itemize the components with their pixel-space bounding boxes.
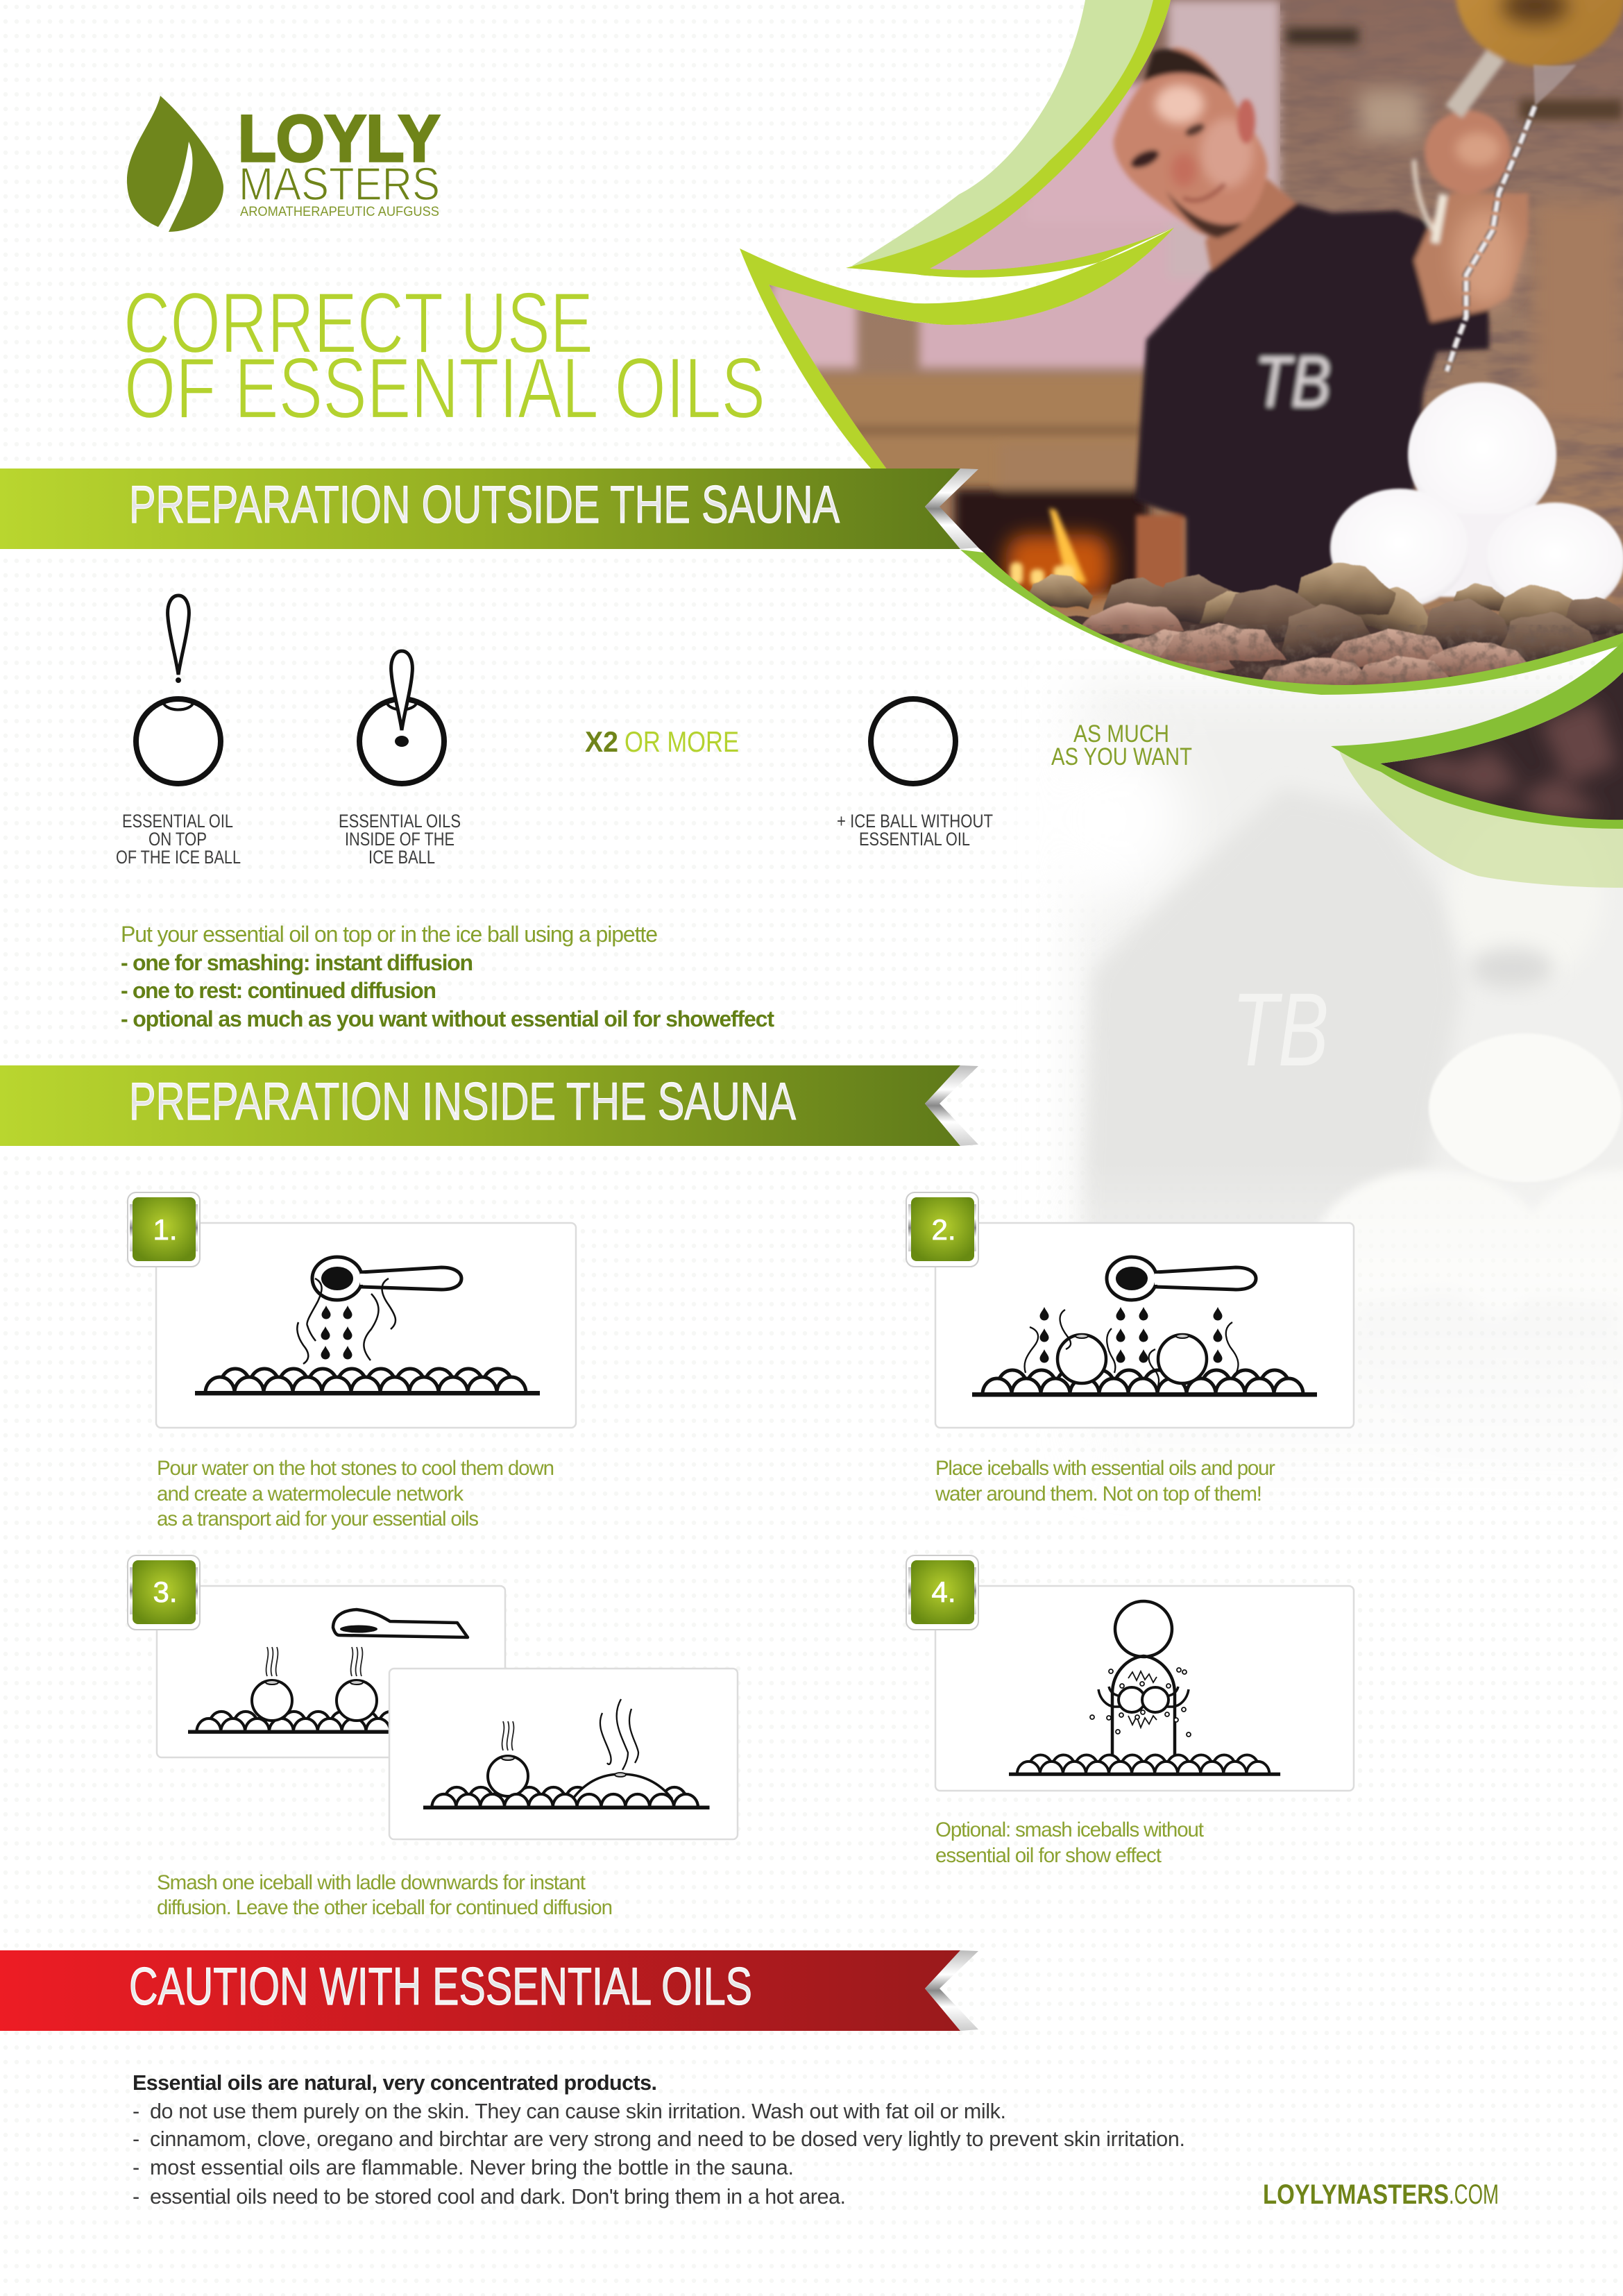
head	[1114, 47, 1268, 238]
green swoosh top translucent	[852, 0, 1166, 272]
text: as much as you want: AS MUCH	[1073, 720, 1169, 748]
title: CORRECT USE	[124, 276, 593, 371]
text: as much as you want	[1051, 720, 1192, 770]
ghost logo: TB	[1232, 971, 1329, 1088]
text: step 4 caption: essential oil for show effect	[935, 1844, 1162, 1867]
label: essential oil on top: ON TOP	[148, 829, 207, 850]
text: step 4 caption	[935, 1818, 1204, 1867]
hero photo	[729, 0, 1623, 701]
logo wordmark: LOYLY	[238, 102, 440, 176]
raised arm	[1414, 193, 1529, 327]
step badge 4	[906, 1555, 978, 1630]
text: step 3 caption: Smash one iceball with ladle downwards for instant	[157, 1871, 586, 1894]
banner: caution with essential oils: CAUTION WITH ESSENTIAL OILS	[129, 1957, 752, 2016]
panel: step 3	[128, 1555, 738, 1839]
panel: step 4	[906, 1555, 1354, 1791]
text block: caution list: -	[133, 2127, 139, 2151]
label: ice ball without oil: + ICE BALL WITHOUT	[837, 811, 993, 832]
ladle	[1454, 0, 1623, 112]
banner: preparation inside the sauna	[0, 1065, 978, 1146]
logo masters: MASTERS	[239, 158, 440, 210]
faded ghost photo background	[1048, 686, 1623, 1222]
label: essential oils inside: INSIDE OF THE	[345, 829, 454, 850]
rocks	[999, 562, 1623, 701]
step badge 1	[128, 1192, 200, 1267]
man	[1114, 47, 1529, 597]
text block: caution list: do not use them purely on the skin. They can cause skin irritation. Wash out with fat oil or milk.	[150, 2100, 1006, 2123]
illustration: ice balls and water drops	[972, 1257, 1317, 1396]
step badge 4: 4.	[931, 1576, 956, 1608]
banner: caution with essential oils	[0, 1950, 978, 2031]
neck	[1205, 178, 1296, 273]
step badge 2: 2.	[931, 1213, 956, 1246]
panel: step 2	[906, 1192, 1354, 1428]
illustration: smashing ice balls	[1009, 1601, 1280, 1776]
text block: caution list: cinnamom, clove, oregano and birchtar are very strong and need to be dosed very lightly to prevent skin irritation.	[150, 2127, 1185, 2151]
label: essential oils inside: ESSENTIAL OILS	[339, 811, 461, 832]
text block: oil instructions: Put your essential oil on top or in the ice ball using a pipette	[121, 922, 658, 947]
card: ladle above ice balls	[157, 1586, 505, 1757]
banner: preparation outside the sauna: PREPARATION OUTSIDE THE SAUNA	[129, 475, 840, 534]
text: step 1 caption: Pour water on the hot stones to cool them down	[157, 1457, 554, 1480]
shirt logo: TB	[1255, 341, 1331, 423]
text block: caution list: -	[133, 2156, 139, 2179]
panel: step 1	[128, 1192, 576, 1428]
text: step 1 caption	[157, 1457, 554, 1530]
icon: plain ice ball	[871, 699, 955, 784]
label: essential oil on top: OF THE ICE BALL	[116, 847, 241, 868]
text: step 2 caption: Place iceballs with essential oils and pour	[935, 1457, 1275, 1480]
step badge 3	[128, 1555, 200, 1630]
text block: caution list: -	[133, 2100, 139, 2123]
banner: preparation inside the sauna: PREPARATION INSIDE THE SAUNA	[129, 1072, 796, 1131]
text: step 4 caption: Optional: smash iceballs without	[935, 1818, 1204, 1841]
label: essential oil on top: ESSENTIAL OIL	[122, 811, 233, 832]
banner: preparation outside the sauna	[0, 469, 978, 549]
fire flames	[1010, 508, 1087, 586]
label: essential oils inside	[339, 811, 461, 868]
lower arm	[1136, 515, 1183, 591]
text: as much as you want: AS YOU WANT	[1051, 743, 1192, 770]
step badge 3: 3.	[153, 1576, 178, 1608]
text: x2 or more: X2	[585, 725, 618, 758]
text: step 3 caption: diffusion. Leave the other iceball for continued diffusion	[157, 1896, 613, 1919]
text: x2 or more: OR MORE	[624, 725, 739, 758]
icon: leaf	[127, 96, 223, 232]
step badge 2	[906, 1192, 978, 1267]
brick texture	[1280, 0, 1623, 694]
water stream	[1447, 65, 1577, 371]
rock photo lower right	[1353, 659, 1623, 840]
logo	[127, 96, 440, 232]
text: step 1 caption: as a transport aid for your essential oils	[157, 1508, 479, 1530]
text: step 3 caption	[157, 1871, 613, 1919]
text block: caution list	[133, 2071, 1185, 2209]
label: essential oil on top	[116, 811, 241, 868]
website link: .COM	[1449, 2179, 1499, 2210]
text block: caution list: Essential oils are natural, very concentrated products.	[133, 2071, 657, 2095]
step badge 1: 1.	[153, 1213, 178, 1246]
icon: oil on top of ice ball	[136, 596, 221, 784]
text block: oil instructions: - one to rest: continued diffusion	[121, 978, 436, 1003]
text block: oil instructions	[121, 922, 774, 1031]
green swoosh frame	[740, 0, 1174, 469]
shirt	[1135, 203, 1489, 597]
label: ice ball without oil: ESSENTIAL OIL	[859, 829, 970, 850]
hand	[1425, 110, 1511, 194]
text: step 1 caption: and create a watermolecule network	[157, 1483, 464, 1505]
card: smashed ice ball	[389, 1669, 738, 1839]
icon: oil inside ice ball	[359, 651, 444, 784]
logo tagline: AROMATHERAPEUTIC AUFGUSS	[240, 205, 439, 219]
label: essential oils inside: ICE BALL	[368, 847, 435, 868]
text block: oil instructions: - optional as much as you want without essential oil for showeffect	[121, 1006, 774, 1031]
text block: caution list: most essential oils are flammable. Never bring the bottle in the sauna.	[150, 2156, 794, 2179]
illustration: ladle pouring water on stones	[195, 1257, 540, 1395]
title: OF ESSENTIAL OILS	[124, 341, 765, 437]
text: x2 or more	[585, 725, 739, 758]
ice balls	[1330, 382, 1623, 616]
lower right translucent swoosh	[1339, 751, 1623, 888]
text block: caution list: essential oils need to be stored cool and dark. Don't bring them in a hot area.	[150, 2185, 846, 2209]
text: step 2 caption: water around them. Not on top of them!	[935, 1483, 1262, 1505]
title	[124, 276, 765, 437]
label: ice ball without oil	[837, 811, 993, 850]
website link: LOYLYMASTERS	[1263, 2179, 1449, 2210]
green arc under photo	[960, 550, 1623, 695]
lower right green swoosh	[1331, 641, 1623, 829]
text block: oil instructions: - one for smashing: instant diffusion	[121, 950, 473, 975]
text: step 2 caption	[935, 1457, 1275, 1505]
text block: caution list: -	[133, 2185, 139, 2209]
